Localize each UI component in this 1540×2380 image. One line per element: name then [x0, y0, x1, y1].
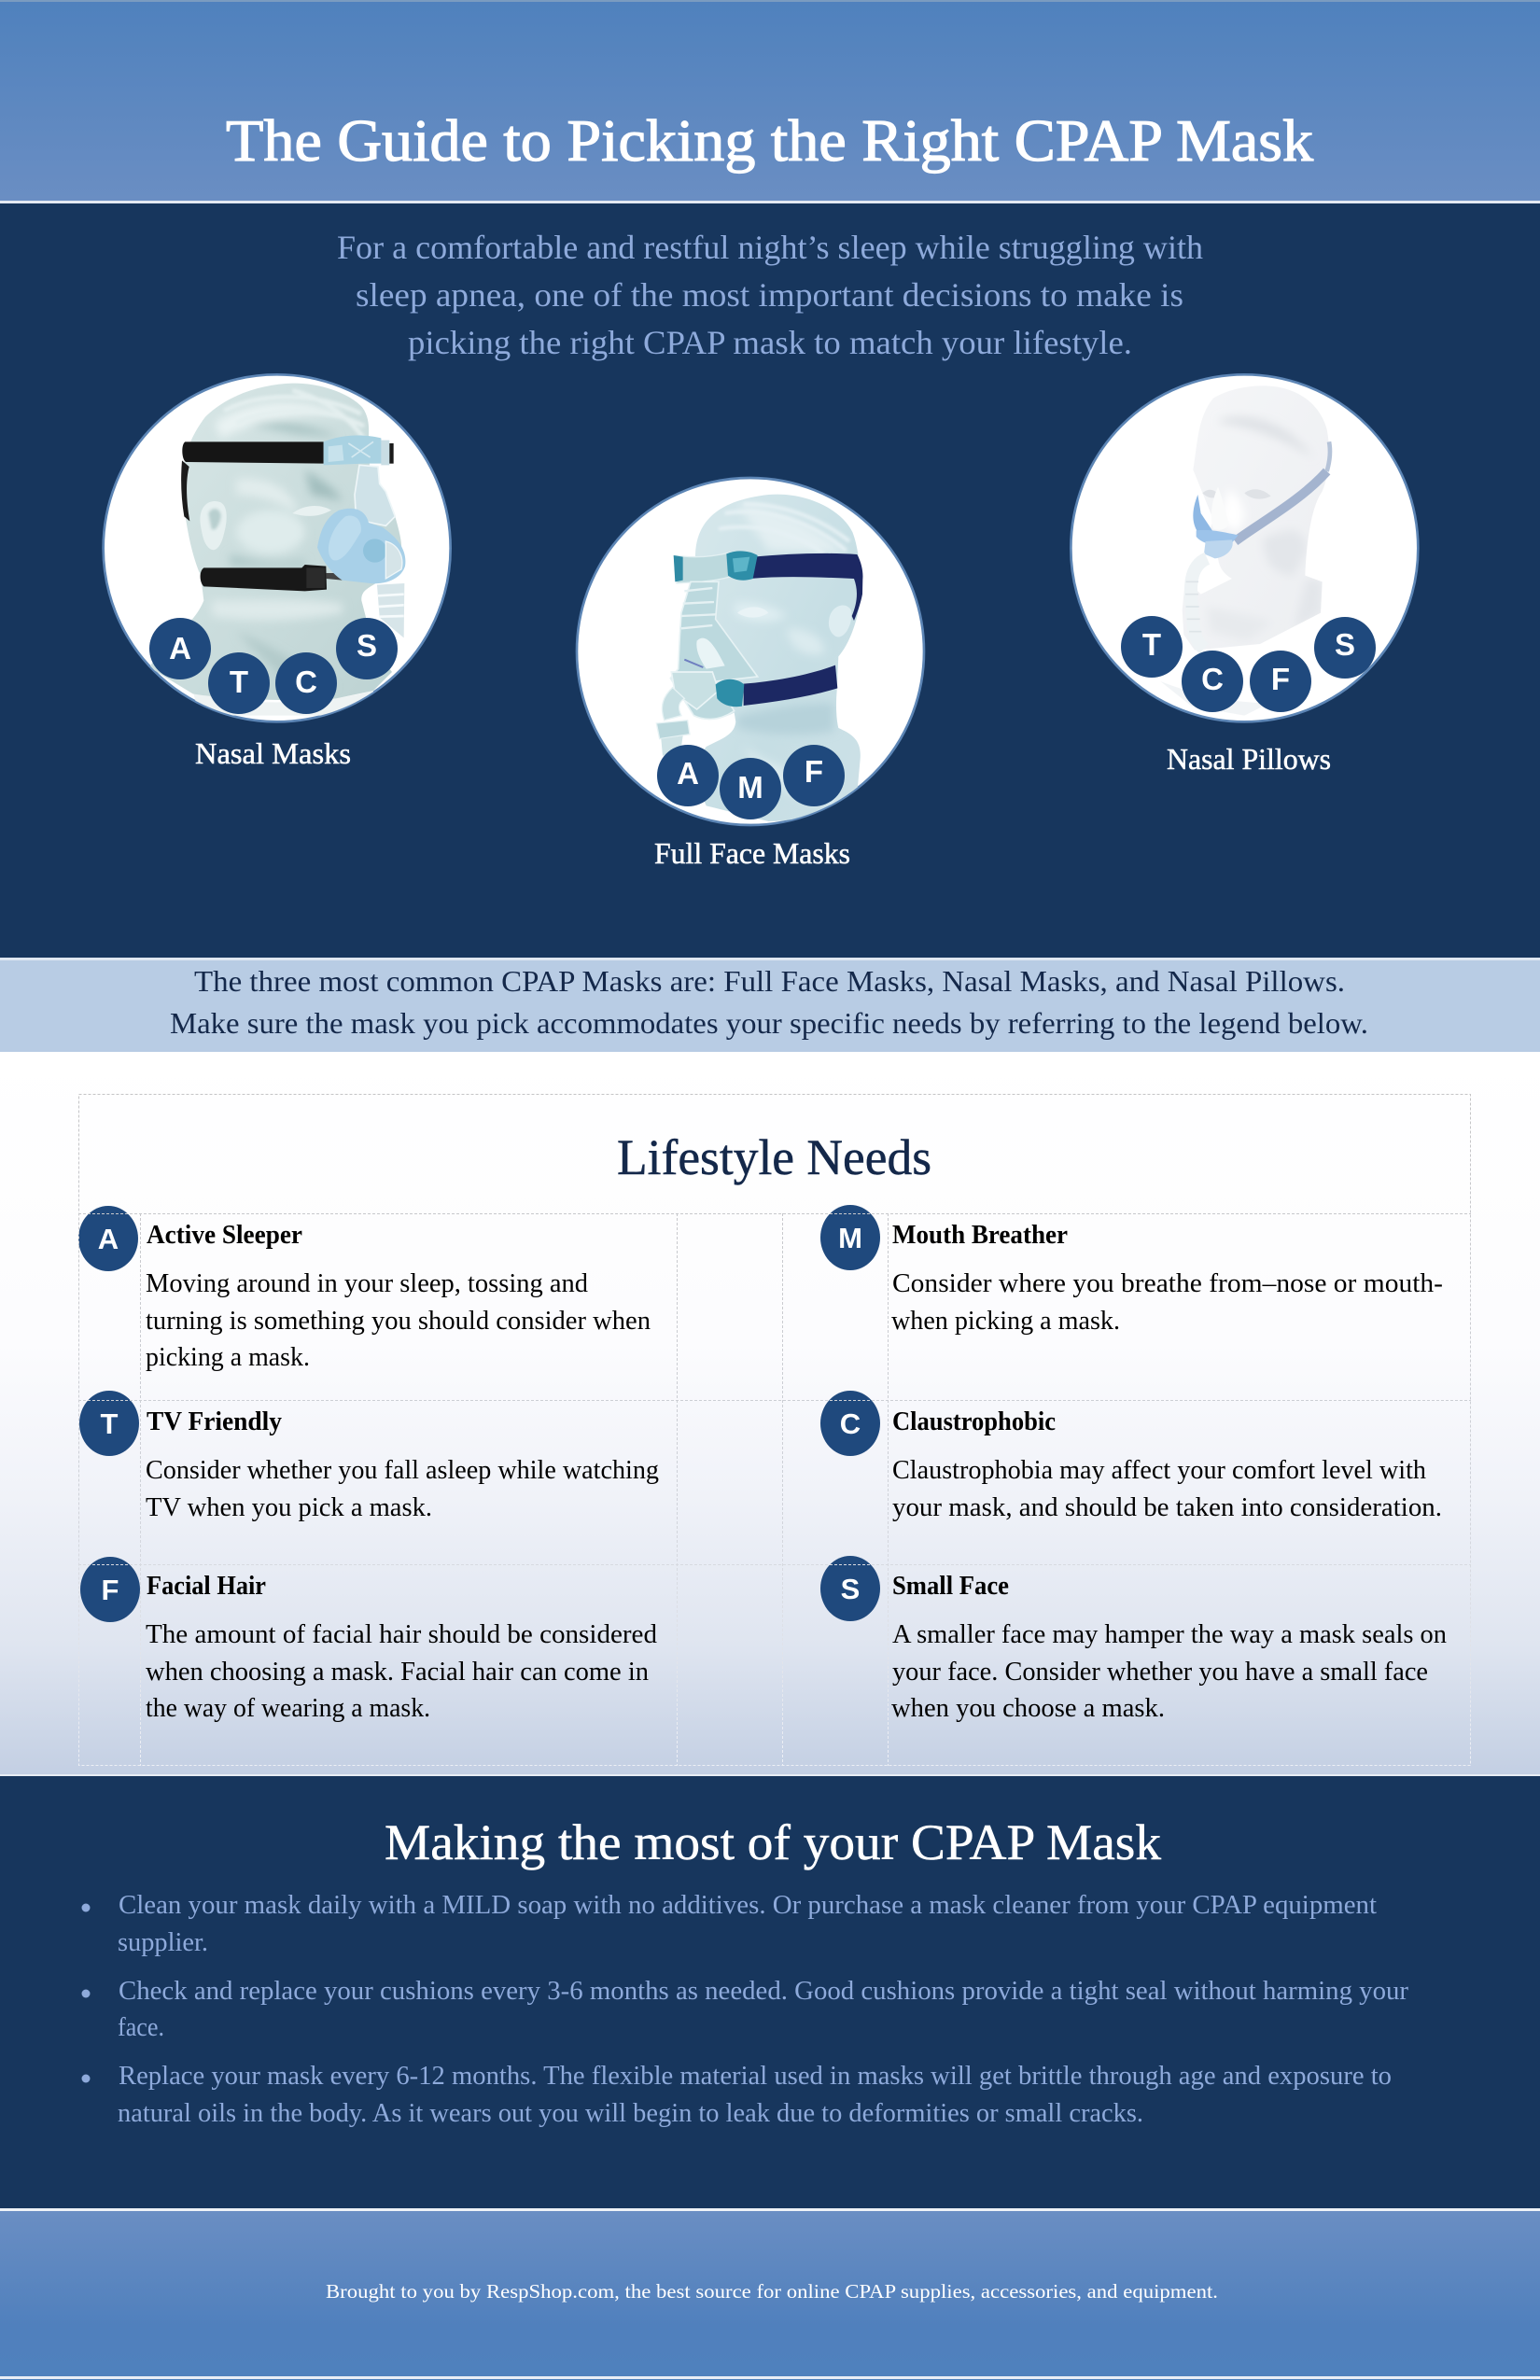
legend item: tv friendly: [79, 1391, 659, 1522]
tip 1: supplier.: [118, 1928, 208, 1957]
badge S: [820, 1556, 880, 1621]
item text: Moving around in your sleep, tossing and: [146, 1269, 588, 1298]
item title: Mouth Breather: [892, 1221, 1068, 1250]
lower clip: [716, 679, 744, 707]
item text: [146, 1456, 659, 1522]
item title: TV Friendly: [147, 1407, 282, 1436]
item title: Small Face: [892, 1572, 1009, 1601]
badge T: T: [230, 665, 248, 699]
panel: making the most of your CPAP mask: [0, 1774, 1540, 2208]
lower strap: [201, 565, 327, 591]
badge F: F: [805, 754, 823, 789]
badge A: A: [677, 756, 699, 791]
item text: [891, 1620, 1447, 1723]
item text: [891, 1269, 1443, 1336]
badge M: M: [838, 1222, 862, 1254]
back strap: [181, 460, 189, 521]
footer credit: Brought to you by RespShop.com, the best source for online CPAP supplies, accessories, and equipment.: [326, 2280, 1218, 2303]
label: full face masks: Full Face Masks: [654, 836, 850, 870]
tip 3: natural oils in the body. As it wears out you will begin to leak due to deformities or small cracks.: [118, 2099, 1143, 2128]
nasal pillow frame: [1193, 495, 1213, 532]
badge T: T: [1142, 627, 1161, 662]
forehead support: [675, 553, 735, 583]
clear frame: [355, 465, 395, 525]
item text: your mask, and should be taken into consideration.: [892, 1493, 1442, 1522]
item title: Facial Hair: [147, 1572, 266, 1601]
badge C: [275, 652, 337, 714]
top strap: [182, 441, 324, 464]
badge A: [657, 745, 719, 806]
badge A: [149, 618, 211, 679]
intro paragraph: [337, 229, 1203, 361]
badge S: [336, 618, 398, 679]
item text: when you choose a mask.: [891, 1694, 1165, 1723]
ear: [829, 606, 851, 637]
item text: when picking a mask.: [891, 1307, 1120, 1336]
item text: when choosing a mask. Facial hair can come in: [146, 1658, 649, 1687]
intro paragraph: picking the right CPAP mask to match your lifestyle.: [408, 324, 1132, 361]
badge M: [820, 1205, 880, 1270]
badge T: [208, 652, 270, 714]
panel: intro and mask types: [0, 203, 1540, 958]
item text: your face. Consider whether you have a small face: [892, 1658, 1428, 1687]
label: nasal masks: Nasal Masks: [195, 736, 351, 770]
item text: [146, 1620, 657, 1723]
badge T: T: [101, 1407, 119, 1440]
label: nasal pillows: Nasal Pillows: [1167, 742, 1331, 776]
item text: A smaller face may hamper the way a mask seals on: [892, 1620, 1447, 1649]
item title: Active Sleeper: [147, 1221, 302, 1250]
panel: summary band: [0, 958, 1540, 1052]
feature badges: A T C S: [149, 618, 398, 714]
tip 2: Check and replace your cushions every 3-6 months as needed. Good cushions provide a tight seal without harming your: [119, 1977, 1409, 2006]
badge C: C: [295, 665, 317, 699]
intro paragraph: For a comfortable and restful night’s sleep while struggling with: [337, 229, 1203, 266]
badge C: C: [840, 1407, 861, 1440]
illustration: full face mask on mannequin: [577, 478, 924, 825]
badge S: S: [841, 1573, 860, 1605]
mask card: full face masks: [577, 478, 924, 870]
badge C: [820, 1391, 880, 1456]
mask card: nasal pillows: [1071, 374, 1418, 776]
item text: picking a mask.: [146, 1343, 310, 1372]
legend item: mouth breather: [820, 1205, 1443, 1336]
badge C: C: [1201, 662, 1224, 696]
item text: TV when you pick a mask.: [146, 1493, 432, 1522]
feature badges: A M F: [657, 745, 845, 819]
badge C: [1182, 651, 1243, 712]
legend item: claustrophobic: [820, 1391, 1442, 1522]
head strap: [1235, 471, 1327, 541]
illustration: nasal mask on mannequin: [104, 374, 451, 721]
summary text: [170, 964, 1368, 1040]
item text: Consider where you breathe from–nose or mouth-: [892, 1269, 1443, 1298]
badge M: M: [737, 770, 763, 805]
item text: [146, 1269, 651, 1372]
header band: [0, 0, 1540, 203]
item text: Claustrophobia may affect your comfort level with: [892, 1456, 1426, 1485]
badge T: [1121, 616, 1183, 678]
footer band: [0, 2208, 1540, 2380]
badge S: S: [1335, 627, 1355, 662]
legend item: active sleeper: [78, 1206, 651, 1372]
badge F: [1250, 651, 1311, 712]
badge F: F: [102, 1574, 119, 1606]
forehead support: [324, 435, 383, 465]
heading: lifestyle needs: Lifestyle Needs: [617, 1129, 931, 1185]
badge A: A: [98, 1223, 119, 1255]
hose: [377, 583, 404, 637]
item text: turning is something you should consider when: [146, 1307, 651, 1336]
badge S: [1314, 617, 1376, 679]
legend item: small face: [820, 1556, 1447, 1723]
tip 1: [82, 1891, 1377, 1957]
tip 1: Clean your mask daily with a MILD soap with no additives. Or purchase a mask cleaner from your CPAP equipment: [119, 1891, 1377, 1920]
summary text: Make sure the mask you pick accommodates your specific needs by referring to the legend below.: [170, 1006, 1368, 1040]
tip 3: Replace your mask every 6-12 months. The flexible material used in masks will get brittle through age and exposure to: [119, 2062, 1392, 2091]
elbow and hose: [662, 688, 684, 721]
item title: Claustrophobic: [892, 1407, 1056, 1436]
badge F: [783, 745, 845, 806]
panel: lifestyle needs: [0, 1052, 1540, 1775]
badge M: [720, 758, 781, 819]
title: The Guide to Picking the Right CPAP Mask: [226, 107, 1313, 174]
badge T: [79, 1391, 139, 1456]
nasal cushion: [317, 509, 405, 583]
clear full-face shell: [670, 581, 758, 719]
chin strap: [744, 665, 837, 706]
tip 2: [82, 1977, 1409, 2042]
badge F: F: [1271, 662, 1290, 696]
summary text: The three most common CPAP Masks are: Full Face Masks, Nasal Masks, and Nasal Pillows.: [194, 964, 1345, 998]
illustration: nasal pillows on mannequin: [1071, 374, 1418, 721]
mask card: nasal masks: [104, 374, 451, 770]
intro paragraph: sleep apnea, one of the most important decisions to make is: [356, 276, 1183, 314]
legend item: facial hair: [80, 1557, 657, 1723]
item text: [892, 1456, 1442, 1522]
head strap: [749, 553, 862, 621]
heading: making the most: Making the most of your CPAP Mask: [385, 1814, 1161, 1870]
ear: [200, 501, 227, 550]
item text: the way of wearing a mask.: [146, 1694, 430, 1723]
tip 2: face.: [118, 2013, 164, 2042]
badge A: [78, 1206, 138, 1271]
item text: Consider whether you fall asleep while watching: [146, 1456, 659, 1485]
item text: The amount of facial hair should be considered: [146, 1620, 657, 1649]
hose: [1191, 558, 1207, 649]
badge A: A: [169, 631, 191, 665]
tip 3: [82, 2062, 1392, 2128]
badge F: [80, 1557, 140, 1622]
feature badges: T C F S: [1121, 616, 1376, 712]
badge S: S: [357, 628, 377, 663]
